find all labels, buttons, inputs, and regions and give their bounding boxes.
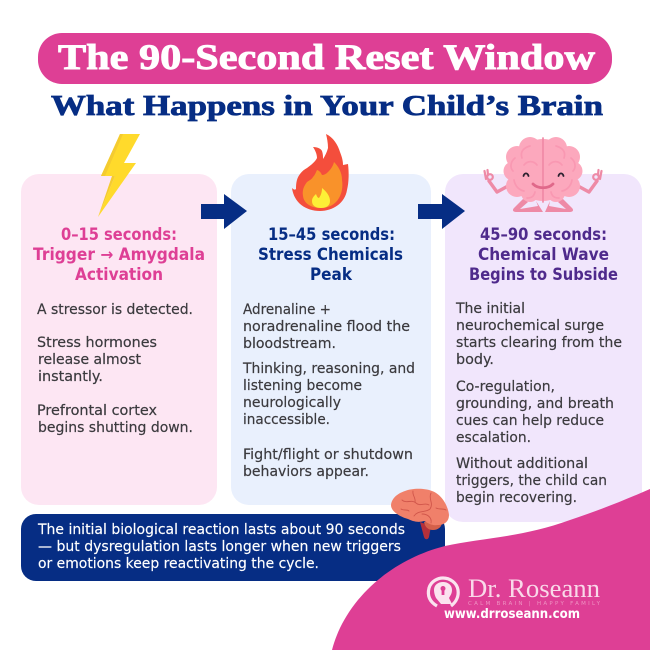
panel heading: trigger: Trigger → Amygdala bbox=[33, 245, 205, 264]
panel body: stress chemicals: noradrenaline flood the bbox=[243, 319, 410, 335]
icon: lightning bolt bbox=[98, 134, 140, 217]
logo wordmark: Dr. Roseann bbox=[468, 574, 600, 603]
panel heading: stress chemicals: Peak bbox=[310, 265, 353, 284]
callout: 90 second summary: The initial biological reaction lasts about 90 seconds bbox=[37, 522, 405, 538]
pink corner wave bbox=[332, 489, 650, 650]
panel body: stress chemicals: behaviors appear. bbox=[243, 464, 369, 480]
panel body: stress chemicals: bloodstream. bbox=[243, 336, 336, 352]
panel body: trigger: Stress hormones bbox=[37, 335, 157, 351]
logo mark bbox=[428, 578, 458, 606]
panel body: stress chemicals: inaccessible. bbox=[243, 412, 330, 428]
panel body: stress chemicals: Thinking, reasoning, and bbox=[242, 361, 415, 377]
panel heading: stress chemicals bbox=[258, 225, 403, 284]
panel body: chemical wave: begin recovering. bbox=[456, 490, 577, 506]
callout: 90 second summary: or emotions keep reactivating the cycle. bbox=[38, 556, 319, 572]
mascot folds bbox=[511, 138, 575, 202]
panel body: chemical wave: grounding, and breath bbox=[456, 396, 614, 412]
panel body: stress chemicals bbox=[242, 302, 415, 480]
panel: 45–90 seconds bbox=[445, 174, 642, 522]
logo: Dr. Roseann bbox=[428, 574, 601, 607]
logo tagline: CALM BRAIN | HAPPY FAMILY bbox=[468, 601, 601, 607]
panel body: trigger: instantly. bbox=[38, 369, 103, 385]
panel body: chemical wave bbox=[455, 301, 622, 506]
arrow: second to third stage bbox=[418, 194, 465, 229]
panel body: chemical wave: body. bbox=[456, 352, 494, 368]
panel: 0–15 seconds bbox=[21, 174, 217, 505]
panel body: chemical wave: starts clearing from the bbox=[456, 335, 622, 351]
panel body: stress chemicals: listening become bbox=[243, 378, 362, 394]
subtitle: What Happens in Your Child’s Brain bbox=[51, 90, 603, 122]
website url: www.drroseann.com bbox=[444, 607, 580, 622]
mascot hands bbox=[484, 170, 602, 180]
title banner: The 90-Second Reset Window bbox=[58, 37, 595, 77]
callout: 90 second summary bbox=[21, 514, 445, 581]
panel body: trigger: A stressor is detected. bbox=[37, 302, 193, 318]
panel body: chemical wave: Co-regulation, bbox=[456, 379, 555, 395]
panel heading: stress chemicals: Stress Chemicals bbox=[258, 245, 403, 264]
callout: 90 second summary: — but dysregulation lasts longer when new triggers bbox=[38, 539, 401, 555]
panel: 15–45 seconds bbox=[231, 174, 431, 505]
panel heading: chemical wave bbox=[469, 225, 618, 284]
panel body: chemical wave: cues can help reduce bbox=[456, 413, 604, 429]
icon: flame bbox=[292, 134, 349, 211]
mascot arms bbox=[489, 181, 597, 192]
panel body: trigger: release almost bbox=[38, 352, 141, 368]
panel body: stress chemicals: Adrenaline + bbox=[243, 302, 331, 318]
panel body: chemical wave: escalation. bbox=[456, 430, 531, 446]
panel heading: stress chemicals: 15–45 seconds: bbox=[268, 225, 395, 244]
panel body: chemical wave: neurochemical surge bbox=[456, 318, 604, 334]
icon: smiling brain mascot bbox=[484, 137, 602, 212]
mascot face bbox=[524, 173, 564, 188]
panel body: chemical wave: triggers, the child can bbox=[456, 473, 607, 489]
panel body: trigger: begins shutting down. bbox=[38, 420, 193, 436]
panel heading: chemical wave: Chemical Wave bbox=[478, 245, 609, 264]
panel body: trigger: Prefrontal cortex bbox=[37, 403, 157, 419]
panel heading: chemical wave: Begins to Subside bbox=[469, 265, 618, 284]
panel body: stress chemicals: Fight/flight or shutdown bbox=[243, 447, 413, 463]
panel body: trigger bbox=[37, 302, 193, 436]
mascot head bbox=[504, 137, 582, 202]
panel body: chemical wave: Without additional bbox=[456, 456, 588, 472]
panel heading: trigger: 0–15 seconds: bbox=[61, 225, 177, 244]
panel heading: chemical wave: 45–90 seconds: bbox=[480, 225, 607, 244]
title banner bbox=[38, 33, 612, 84]
panel heading: trigger: Activation bbox=[75, 265, 163, 284]
panel heading: trigger bbox=[33, 225, 205, 284]
panel body: stress chemicals: neurologically bbox=[243, 395, 341, 411]
icon: anatomical brain bbox=[391, 489, 449, 539]
arrow: first to second stage bbox=[201, 194, 247, 229]
panel body: chemical wave: The initial bbox=[455, 301, 525, 317]
mascot legs bbox=[513, 199, 573, 212]
